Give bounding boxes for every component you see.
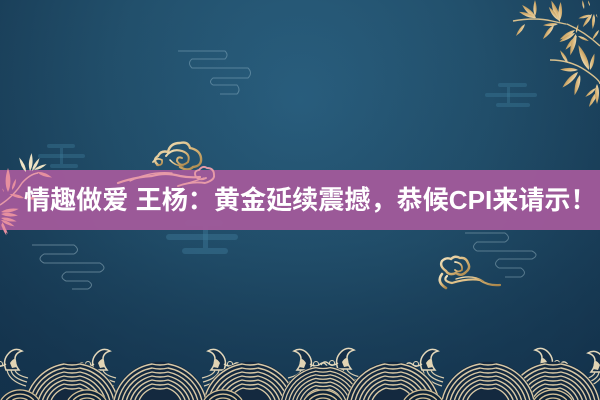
faint line cloud: lower right bbox=[465, 233, 536, 277]
bamboo: left pink and gold bbox=[0, 153, 53, 236]
waves: lower row bbox=[0, 389, 573, 400]
pink ribbon cloud over banner bbox=[118, 167, 214, 186]
faint block cloud: left bbox=[38, 144, 85, 168]
decorative cloud: lower right bbox=[440, 257, 500, 288]
faint block cloud: upper right bbox=[485, 83, 537, 107]
faint block cloud: centre below banner bbox=[166, 220, 238, 254]
wave crests bbox=[0, 348, 600, 388]
bamboo: upper right bbox=[513, 0, 600, 108]
title: 情趣做爱 王杨：黄金延续震撼，恭候CPI来请示！ bbox=[24, 185, 597, 215]
decorative cloud: centre bbox=[153, 143, 201, 170]
waves: upper row bbox=[25, 362, 600, 400]
faint line cloud: lower left bbox=[32, 245, 104, 289]
faint line cloud: top centre bbox=[178, 51, 250, 94]
banner bbox=[0, 170, 600, 230]
